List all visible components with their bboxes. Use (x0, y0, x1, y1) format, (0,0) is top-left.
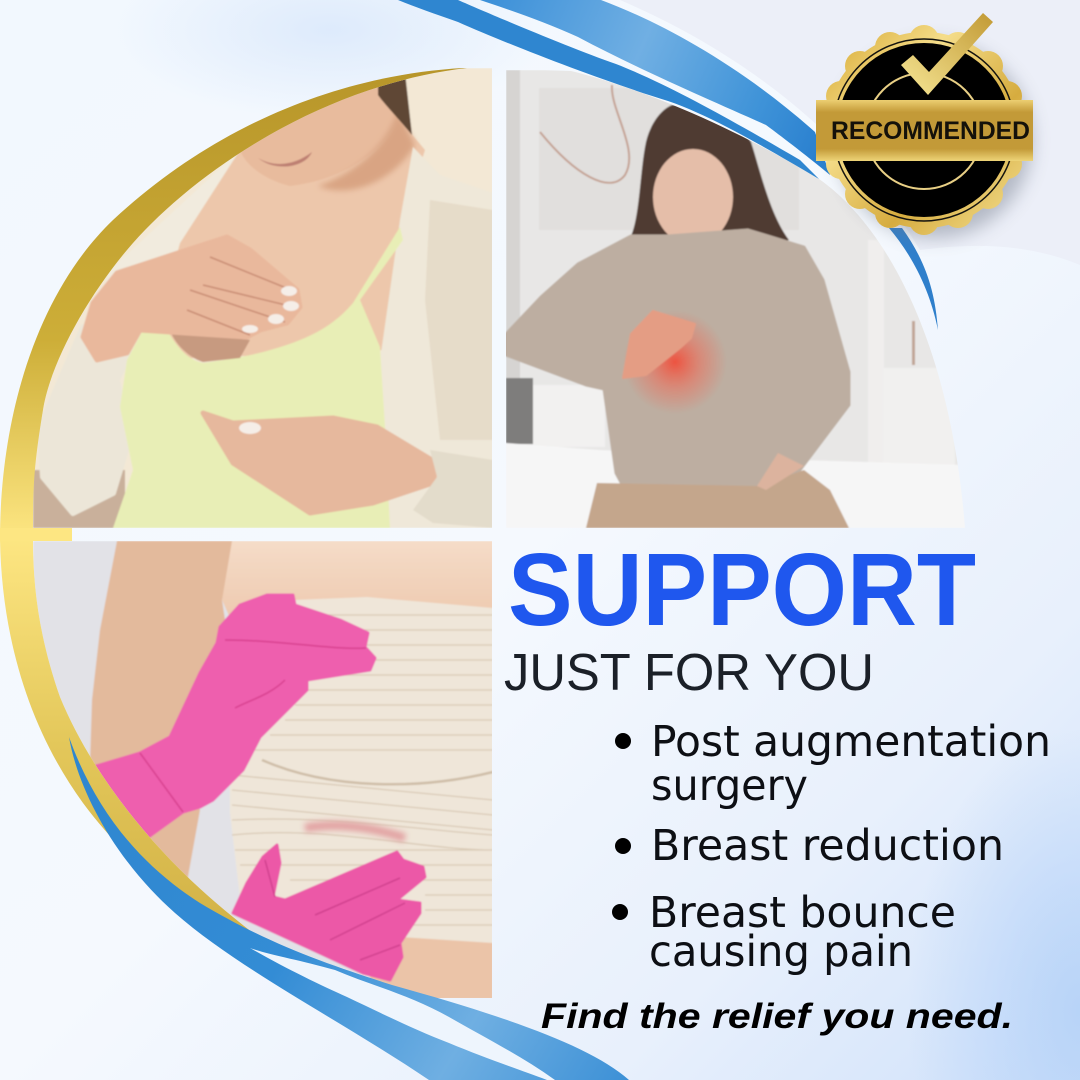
lower hand (203, 413, 437, 513)
bullet list: Breast reduction (651, 821, 1004, 871)
belly skin (370, 935, 493, 999)
background bottom left (33, 470, 125, 528)
camisole (113, 227, 403, 528)
bullet list: surgery (651, 761, 808, 811)
bed (506, 443, 966, 528)
bandage ribs (232, 615, 493, 925)
tagline: Find the relief you need. (541, 997, 1013, 1036)
pants (586, 470, 849, 528)
dark post (506, 378, 533, 444)
photo: gloved hands on bandage (33, 541, 493, 999)
lower glove (233, 845, 425, 980)
cardigan left (110, 157, 234, 276)
bullet list: Breast bounce (649, 888, 956, 938)
bullet list: Post augmentation (651, 717, 1051, 767)
red glow (632, 316, 722, 408)
swoosh: top blue ribbon (398, 0, 938, 330)
face (242, 87, 398, 186)
bullet list: causing pain (649, 927, 913, 977)
face (653, 149, 733, 245)
swoosh: gold arc (0, 68, 467, 970)
right cuff (413, 450, 493, 528)
photo: woman with chest pain (506, 70, 966, 528)
ribbon band (816, 100, 1033, 161)
upper glove (93, 595, 375, 838)
hair (378, 72, 412, 135)
hand on chest (623, 311, 695, 378)
chest skin (150, 120, 425, 360)
upper glove creases (140, 640, 366, 812)
door panels (533, 385, 605, 447)
hand on knee (757, 453, 804, 490)
ribbon tail (889, 228, 938, 330)
lower glove creases (265, 860, 405, 960)
bandage (230, 597, 493, 943)
upper hand finger lines (187, 257, 298, 335)
badge label: RECOMMENDED (831, 117, 1030, 145)
cardigan right (381, 147, 423, 351)
wall art (539, 88, 799, 230)
shadow under hand (172, 334, 250, 363)
photo: hands on chest in cardigan (33, 68, 493, 528)
check mark (901, 13, 993, 95)
upper hand (83, 237, 300, 360)
sweater (506, 230, 849, 486)
shoulder and chest (222, 541, 492, 616)
bullet list (612, 717, 1051, 977)
seal (819, 25, 1029, 235)
neck shadow (318, 110, 415, 191)
badge: recommended (816, 13, 1033, 238)
hair (631, 104, 790, 242)
arm (90, 541, 240, 882)
swoosh: bottom blue ribbon (69, 737, 629, 1080)
heading: support: SUPPORT (508, 532, 976, 647)
subheading: JUST FOR YOU (504, 644, 874, 702)
fingernails (239, 286, 299, 434)
mouth (258, 152, 312, 167)
